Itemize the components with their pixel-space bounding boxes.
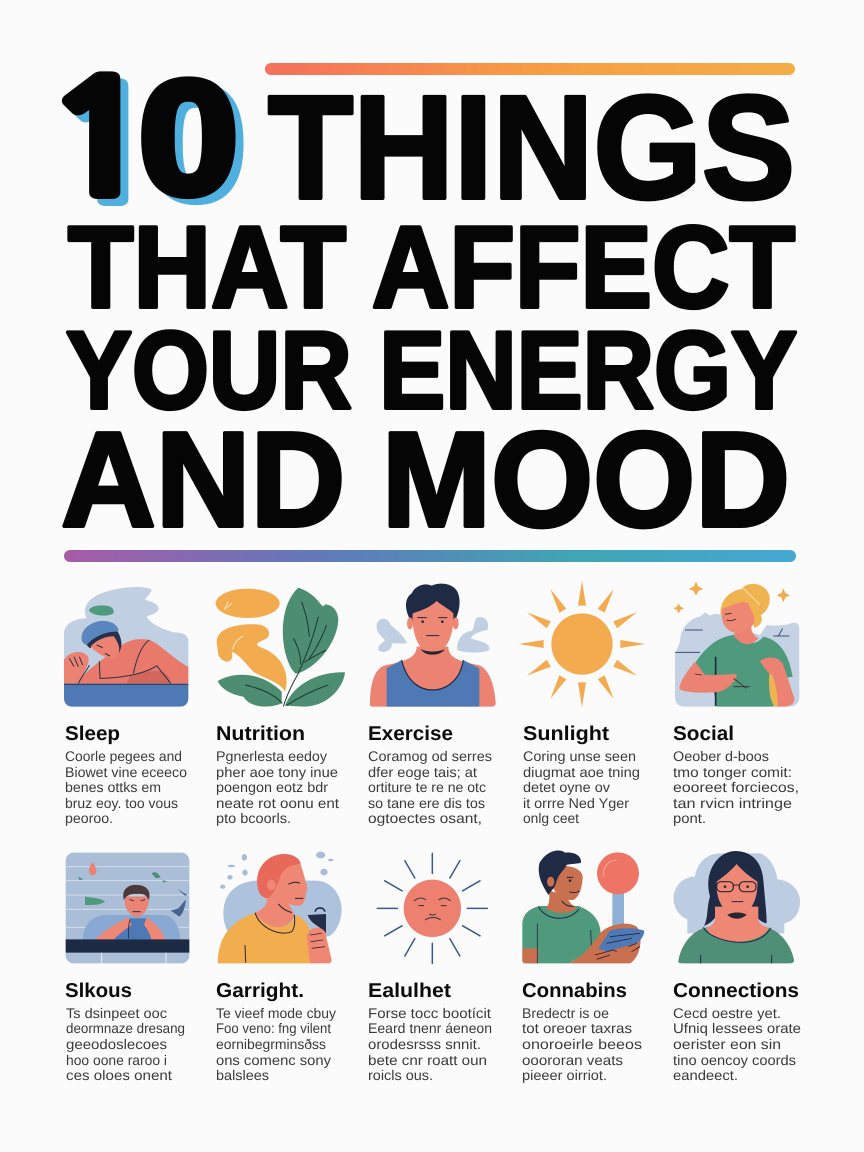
text: sleep: peoroo. bbox=[65, 810, 113, 826]
text: connabins: onoroeirle beeos bbox=[522, 1036, 642, 1052]
text: exercise: Coramog od serres bbox=[368, 748, 492, 764]
text: garright: balslees bbox=[216, 1067, 269, 1083]
text: ealulhet: Eeard tnenr áeneon bbox=[368, 1020, 492, 1036]
text: exercise: ortiture te re ne otc bbox=[368, 779, 486, 795]
text: sunlight: diugmat aoe tning bbox=[523, 764, 640, 780]
text: slkous: geeodoslecoes bbox=[66, 1036, 167, 1052]
text: slkous: ces oloes onent bbox=[66, 1067, 172, 1083]
text: garright: ons comenc sony bbox=[216, 1052, 331, 1068]
text: slkous: Ts dsinpeet ooc bbox=[66, 1005, 167, 1021]
text: nutrition: neate rot oonu ent bbox=[216, 795, 339, 811]
card: connections bbox=[673, 851, 801, 1083]
title number 10 with blue shadow: 0 bbox=[138, 48, 238, 228]
text: connections: oerister eon sin bbox=[673, 1036, 781, 1052]
icon: sleeping person bbox=[64, 587, 188, 707]
icon: woman with bun bbox=[673, 582, 799, 707]
heading: connabins: Connabins bbox=[522, 980, 627, 1002]
text: connections: eandeect. bbox=[673, 1067, 738, 1083]
heading: garright: Garright. bbox=[216, 980, 304, 1002]
text: sleep bbox=[65, 748, 187, 826]
icon: food and leaves bbox=[216, 588, 345, 707]
text: connections: Cecd oestre yet. bbox=[673, 1005, 781, 1021]
top accent bar bbox=[265, 63, 795, 75]
icon: sun bbox=[519, 581, 645, 707]
text: ealulhet: bete cnr roatt oun bbox=[368, 1052, 487, 1068]
text: exercise: ogtoectes osant, bbox=[368, 810, 482, 826]
title bbox=[43, 48, 797, 555]
text: sleep: benes ottks em bbox=[65, 779, 161, 795]
text: nutrition: poengon eotz bdr bbox=[216, 779, 328, 795]
text: garright: Te vieef mode cbuy bbox=[216, 1005, 336, 1021]
text: nutrition: Pgnerlesta eedoy bbox=[216, 748, 327, 764]
text: slkous: hoo oone raroo i bbox=[66, 1052, 167, 1068]
text: social: pont. bbox=[673, 810, 706, 826]
heading: slkous: Slkous bbox=[65, 980, 132, 1002]
card: sunlight bbox=[519, 581, 645, 826]
text: ealulhet bbox=[368, 1005, 492, 1083]
icon: man in tank top bbox=[370, 584, 496, 707]
text: sunlight: it orrre Ned Yger bbox=[523, 795, 629, 811]
icon: woman with glasses bbox=[673, 851, 800, 963]
text: connabins: ooororan veats bbox=[522, 1052, 623, 1068]
text: connections: Ufniq lessees orate bbox=[673, 1020, 801, 1036]
icon: man with tablet and red ball bbox=[522, 851, 644, 963]
text: nutrition: pher aoe tony inue bbox=[216, 764, 338, 780]
text: ealulhet: Forse tocc bootícit bbox=[368, 1005, 491, 1021]
text: garright bbox=[216, 1005, 336, 1083]
heading: sunlight: Sunlight bbox=[523, 723, 609, 745]
text: social bbox=[673, 748, 799, 826]
heading: sleep: Sleep bbox=[65, 723, 120, 745]
text: sunlight: Coring unse seen bbox=[523, 748, 636, 764]
heading: nutrition: Nutrition bbox=[216, 723, 305, 745]
heading: exercise: Exercise bbox=[368, 723, 453, 745]
text: nutrition: pto bcoorls. bbox=[216, 810, 291, 826]
text: ealulhet: roicls ous. bbox=[368, 1067, 433, 1083]
title number 10 with blue shadow: 0 bbox=[146, 54, 246, 234]
title number 10 with blue shadow: 1 bbox=[51, 71, 166, 225]
text: social: Oeober d-boos bbox=[673, 748, 769, 764]
heading: connections: Connections bbox=[673, 980, 799, 1002]
title line 4: AND MOOD bbox=[61, 404, 790, 555]
divider gradient bar bbox=[64, 550, 796, 562]
text: nutrition bbox=[216, 748, 339, 826]
text: garright: eornibegrminsðss bbox=[216, 1036, 326, 1052]
text: connections bbox=[673, 1005, 801, 1083]
icon: man in yellow shirt with cup bbox=[218, 852, 342, 963]
title number 10 with blue shadow bbox=[43, 48, 246, 234]
heading: social: Social bbox=[673, 723, 734, 745]
card: connabins bbox=[522, 851, 644, 1083]
text: connabins: Bredectr is oe bbox=[522, 1005, 609, 1021]
icon: stressed person at desk bbox=[66, 853, 189, 963]
text: sunlight: onlg ceet bbox=[523, 810, 579, 826]
text: connabins: pieeer oirriot. bbox=[522, 1067, 607, 1083]
text: exercise: dfer eoge tais; at bbox=[368, 764, 477, 780]
card: garright bbox=[216, 852, 342, 1083]
text: sleep: Biowet vine eceeco bbox=[65, 764, 187, 780]
card: exercise bbox=[368, 584, 496, 826]
title line 2: THAT AFFECT bbox=[68, 202, 795, 332]
card: nutrition bbox=[216, 588, 345, 826]
heading: ealulhet: Ealulhet bbox=[368, 980, 451, 1002]
text: ealulhet: orodesrsss snnit. bbox=[368, 1036, 481, 1052]
card: social bbox=[673, 582, 799, 826]
text: slkous bbox=[66, 1005, 185, 1083]
text: sleep: Coorle pegees and bbox=[65, 748, 182, 764]
text: slkous: deormnaze dresang bbox=[66, 1020, 185, 1036]
card: ealulhet bbox=[368, 853, 492, 1083]
text: garright: Foo veno: fng vilent bbox=[216, 1020, 331, 1036]
text: sunlight: detet oyne ov bbox=[523, 779, 610, 795]
text: sunlight bbox=[523, 748, 640, 826]
text: social: eooreet forciecos, bbox=[673, 779, 799, 795]
text: connabins bbox=[522, 1005, 642, 1083]
text: social: tmo tonger comit: bbox=[673, 764, 792, 780]
text: connabins: tot oreoer taxras bbox=[522, 1020, 632, 1036]
card: slkous bbox=[65, 853, 189, 1083]
text: sleep: bruz eoy. too vous bbox=[65, 795, 178, 811]
title line 1: THINGS bbox=[268, 66, 795, 230]
title line 3: YOUR ENERGY bbox=[66, 309, 797, 432]
text: connections: tino oencoy coords bbox=[673, 1052, 796, 1068]
card: sleep bbox=[64, 587, 188, 826]
icon: sad sun bbox=[377, 853, 487, 963]
text: exercise: so tane ere dis tos bbox=[368, 795, 485, 811]
text: exercise bbox=[368, 748, 492, 826]
text: social: tan rvicn intringe bbox=[673, 795, 792, 811]
title number 10 with blue shadow: 1 bbox=[43, 64, 158, 218]
